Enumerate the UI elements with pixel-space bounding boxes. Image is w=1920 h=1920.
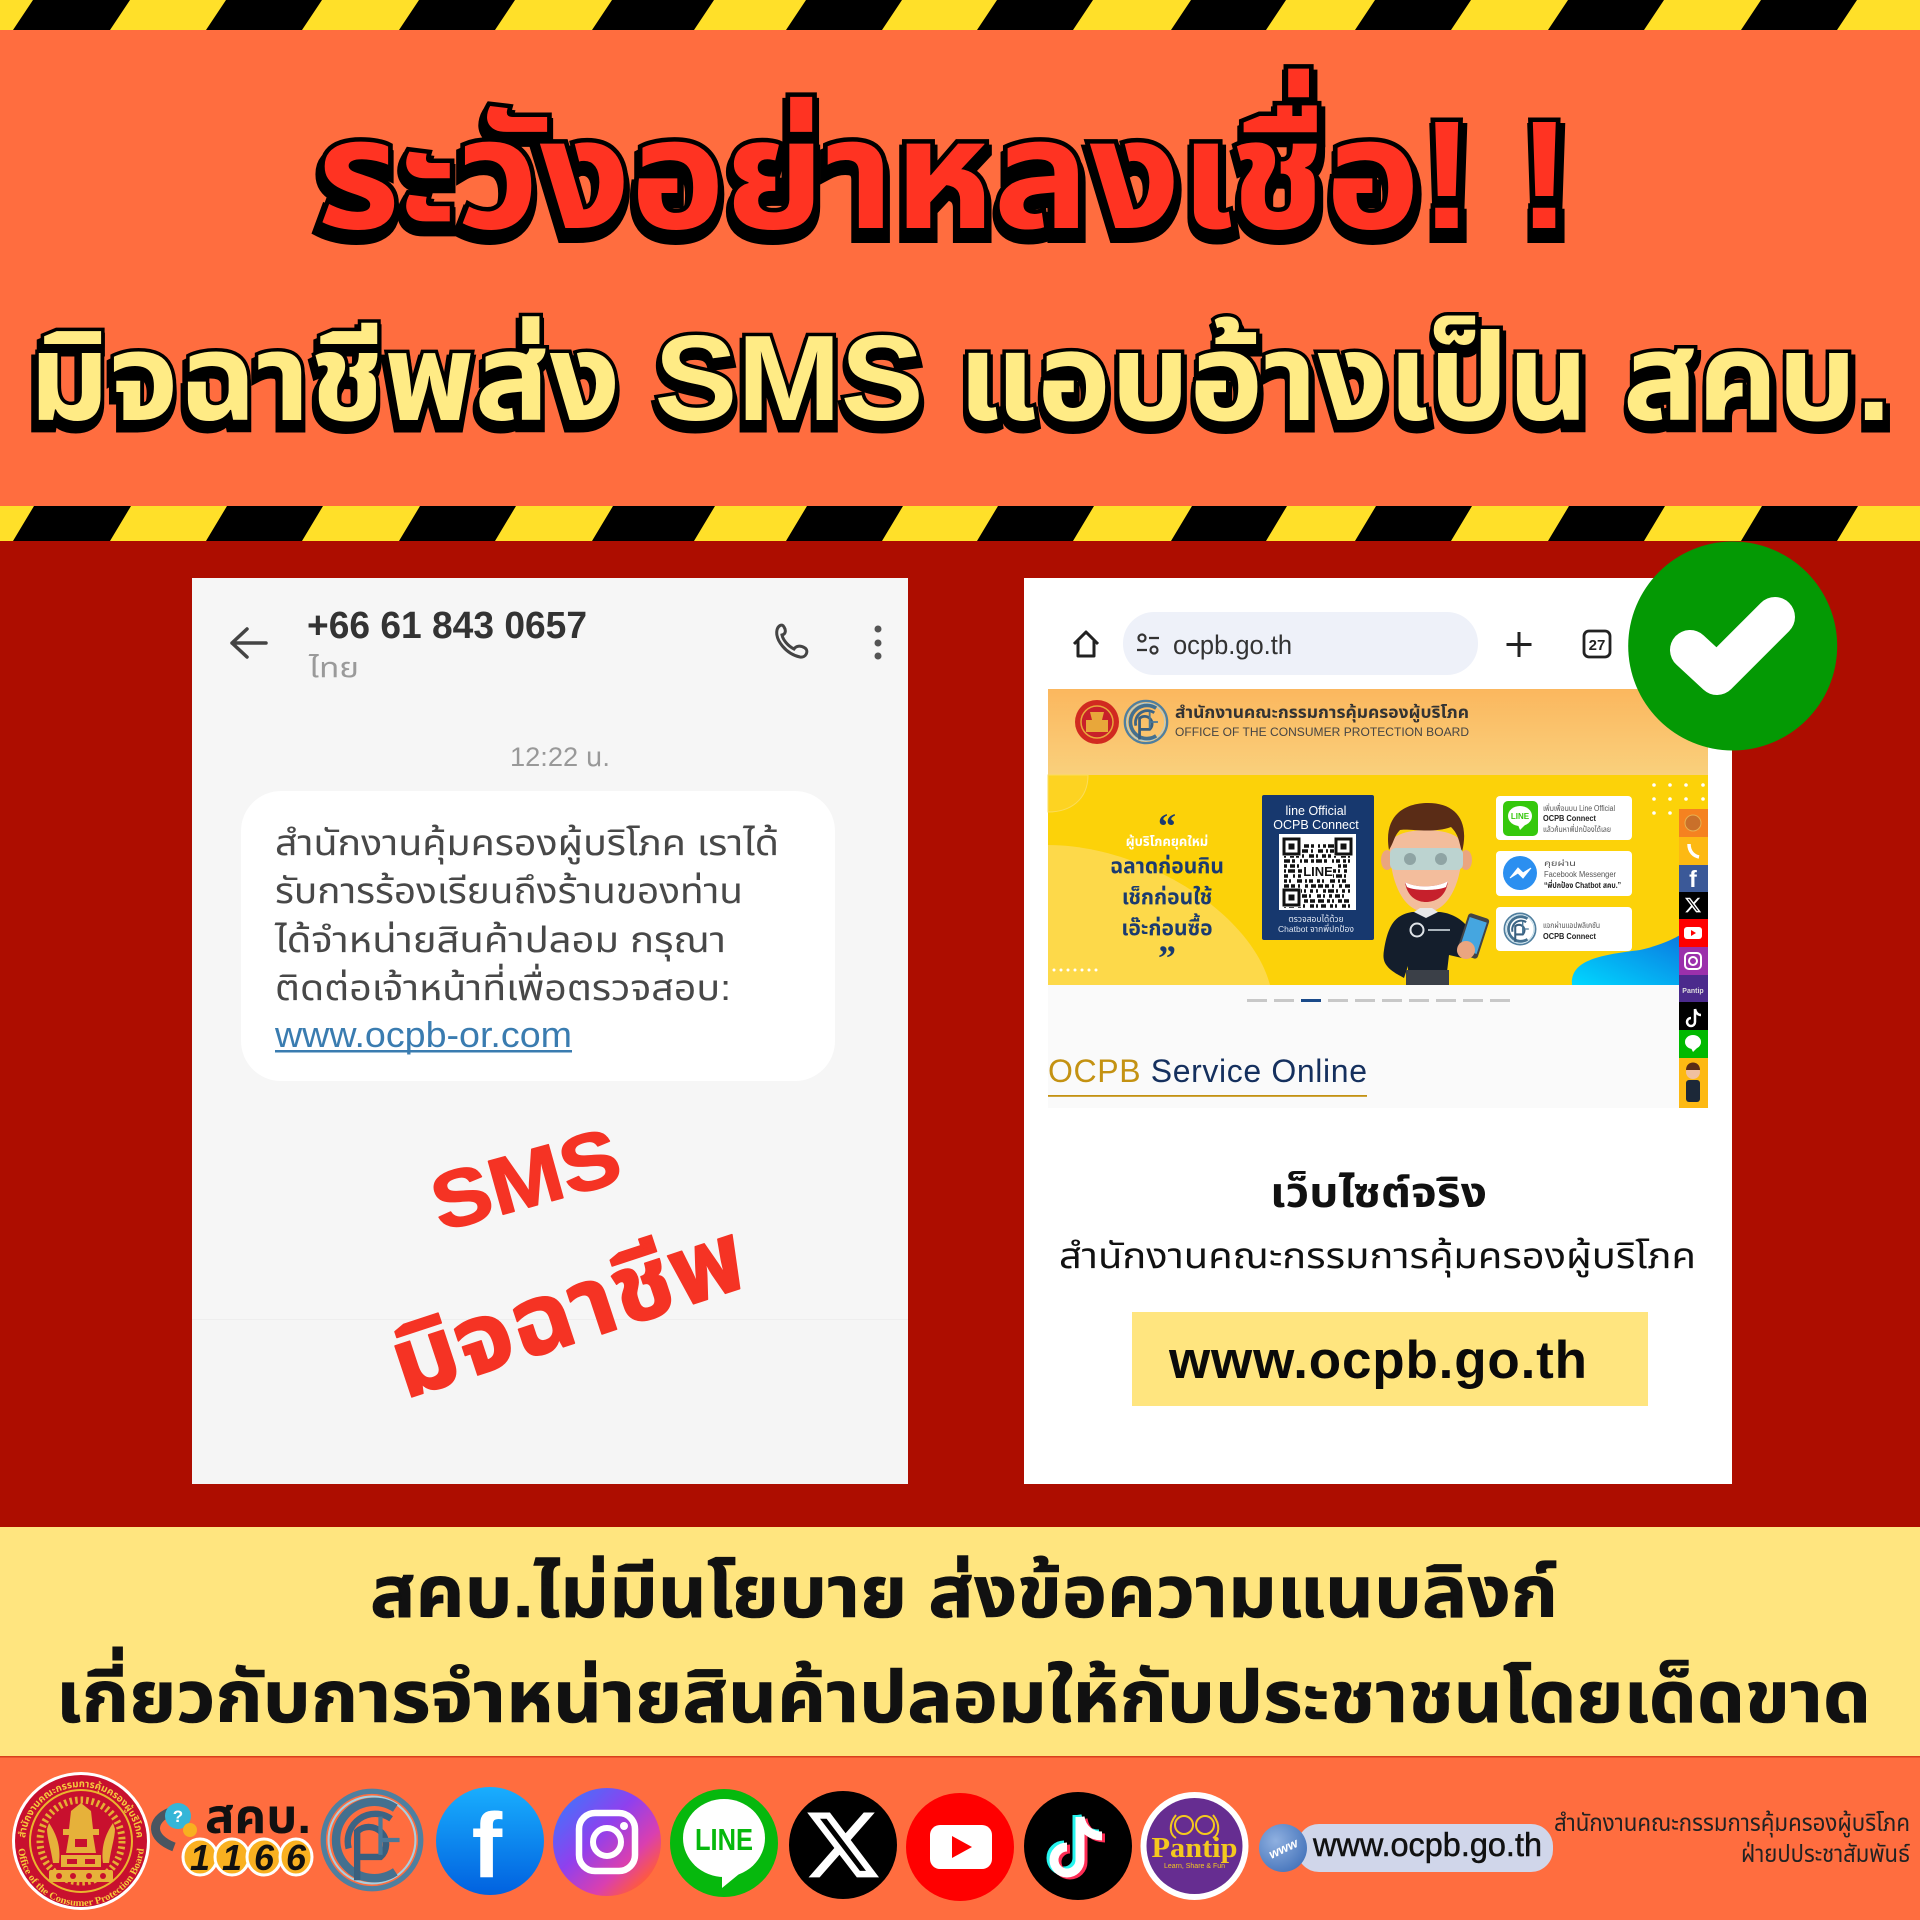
website side social strip: Pantip <box>1682 988 1704 995</box>
phone in hand <box>1456 913 1490 959</box>
icon: site settings <box>1137 634 1159 654</box>
contact cards: แจกผ่านแอปพลิเคชัน <box>1543 920 1600 930</box>
logo: consumer protection board seal: Office of the Consumer Protection Board <box>18 1848 144 1906</box>
subtitle: scam SMS impersonating OCPB: มิจฉาชีพส่ง SMS แอบอ้างเป็น สคบ. <box>29 310 1891 446</box>
address field <box>1123 612 1478 675</box>
icon: line: LINE <box>1511 812 1530 821</box>
logo: consumer protection board seal <box>12 1772 150 1910</box>
icon: green check <box>1628 542 1837 750</box>
slider indicator <box>1247 999 1510 1002</box>
QR panel: OCPB Connect <box>1273 818 1359 832</box>
title: main warning: ระวังอย่าหลงเชื่อ! ! <box>315 76 1573 269</box>
QR panel: LINE <box>1303 864 1333 879</box>
subtitle: scam SMS impersonating OCPB: มิจฉาชีพส่ง SMS แอบอ้างเป็น สคบ. <box>27 317 1893 453</box>
section title: OCPB Service Online <box>1048 1053 1367 1089</box>
icon: tabs count: 27 <box>1589 637 1605 654</box>
website pill <box>1259 1824 1553 1872</box>
header panel <box>0 0 1920 510</box>
notice band: สคบ.ไม่มีนโยบาย ส่งข้อความแนบลิงก์ <box>370 1553 1558 1633</box>
title: main warning: ระวังอย่าหลงเชื่อ! ! <box>317 68 1571 261</box>
footer <box>0 1756 1920 1920</box>
org name English: OFFICE OF THE CONSUMER PROTECTION BOARD <box>1175 725 1469 739</box>
cartoon mascot <box>1381 803 1490 985</box>
message bubble: สำนักงานคุ้มครองผู้บริโภค เราได้ <box>275 822 779 864</box>
slogan: ” <box>1158 938 1176 978</box>
contact cards: เพิ่มเพื่อนบน Line Official <box>1543 802 1615 813</box>
message bubble: www.ocpb-or.com <box>274 1014 572 1055</box>
icon: pantip: Learn, Share & Fun <box>1164 1863 1225 1870</box>
icon: tiktok <box>1024 1792 1132 1900</box>
slogan: “ <box>1158 806 1176 846</box>
logo: hotline 1766: 6 <box>254 1837 275 1878</box>
message bubble: ได้จำหน่ายสินค้าปลอม กรุณา <box>274 919 726 961</box>
icon: facebook <box>436 1787 544 1897</box>
logo: hotline 1766: 1 <box>222 1837 242 1878</box>
contact cards: คุยผ่าน <box>1544 858 1576 868</box>
logo: hotline 1766: 1 <box>190 1837 210 1878</box>
icon: messenger <box>1503 856 1537 890</box>
slogan: เอ๊ะก่อนซื้อ <box>1121 913 1213 940</box>
browser bar <box>1074 612 1610 675</box>
message bubble: ติดต่อเจ้าหน้าที่เพื่อตรวจสอบ: <box>275 963 731 1008</box>
message bubble: รับการร้องเรียนถึงร้านของท่าน <box>275 870 743 911</box>
stamp: scammer: มิจฉาชีพ <box>376 1200 758 1419</box>
sender number: +66 61 843 0657 <box>307 605 587 647</box>
website side social strip <box>1679 809 1708 1108</box>
icon: pantip: Pantip <box>1152 1833 1238 1864</box>
icon: ocpb <box>1504 913 1536 945</box>
contact cards: OCPB Connect <box>1543 932 1596 941</box>
icon: tabs count <box>1584 631 1610 657</box>
icon: instagram <box>553 1788 661 1896</box>
contact cards: “พี่ปกป้อง Chatbot สคบ.” <box>1544 879 1621 890</box>
website pill: www.ocpb.go.th <box>1312 1826 1542 1863</box>
decorative dots <box>1052 783 1705 972</box>
icon: youtube <box>906 1793 1014 1901</box>
official URL box <box>1132 1312 1648 1406</box>
logo: hotline 1766: สคบ. <box>205 1791 311 1844</box>
credit text: ฝ่ายปประชาสัมพันธ์ <box>1741 1841 1910 1868</box>
panel: fake SMS screenshot <box>192 578 908 1484</box>
logo: hotline 1766: 6 <box>286 1837 307 1878</box>
address text: ocpb.go.th <box>1173 630 1292 660</box>
icon: line <box>670 1789 778 1897</box>
panel: real website <box>1024 578 1732 1484</box>
logo: OCPB <box>323 1791 421 1889</box>
icon: home <box>1074 632 1098 656</box>
QR panel: ตรวจสอบได้ด้วย <box>1288 914 1344 924</box>
org name Thai: สำนักงานคณะกรรมการคุ้มครองผู้บริโภค <box>1175 703 1469 723</box>
icon: back arrow <box>232 629 266 657</box>
organisation name: สำนักงานคณะกรรมการคุ้มครองผู้บริโภค <box>1059 1235 1696 1277</box>
slogan: ผู้บริโภคยุคใหม่ <box>1126 834 1208 850</box>
contact cards: OCPB Connect <box>1543 814 1596 823</box>
logo: hotline 1766: ? <box>173 1807 183 1826</box>
notice band <box>0 1527 1920 1756</box>
icon: seal small <box>1075 700 1119 744</box>
credit text <box>1554 1810 1910 1868</box>
website banner <box>1048 775 1708 985</box>
sender country: ไทย <box>308 652 359 683</box>
slogan <box>1110 806 1224 978</box>
bottom hazard stripe of header <box>0 506 1920 541</box>
message bubble <box>241 791 835 1081</box>
icon: plus <box>1506 632 1532 657</box>
contact cards: Facebook Messenger <box>1544 870 1616 879</box>
official URL box: www.ocpb.go.th <box>1168 1331 1587 1390</box>
contact cards: แล้วค้นหาพี่ปกป้องได้เลย <box>1543 823 1611 834</box>
QR panel <box>1262 795 1374 940</box>
icon: X <box>789 1791 897 1899</box>
slogan: ฉลาดก่อนกิน <box>1110 855 1224 878</box>
icon: pantip <box>1140 1792 1248 1900</box>
message time: 12:22 น. <box>510 742 610 772</box>
contact cards <box>1496 796 1632 951</box>
icon: OCPB logo small <box>1125 701 1167 743</box>
QR panel: line Official <box>1286 804 1346 818</box>
blue blob <box>1572 934 1682 985</box>
logo: hotline 1766 <box>155 1791 312 1878</box>
label: real website: เว็บไซต์จริง <box>1270 1169 1487 1216</box>
top hazard stripe <box>0 0 1920 30</box>
website side social strip: f <box>1689 866 1697 892</box>
website lower section <box>1048 985 1679 1108</box>
notice band: เกี่ยวกับการจำหน่ายสินค้าปลอมให้กับประชาชนโดยเด็ดขาด <box>56 1647 1871 1738</box>
QR panel: Chatbot จากพี่ปกป้อง <box>1278 923 1354 934</box>
website pill: www <box>1266 1835 1301 1862</box>
icon: line <box>1503 801 1538 836</box>
stamp: SMS: SMS <box>421 1111 630 1248</box>
slogan: เช็กก่อนใช้ <box>1122 886 1212 909</box>
icon: phone <box>777 625 807 657</box>
icon: line: LINE <box>695 1822 753 1857</box>
website header <box>1048 689 1708 775</box>
logo: consumer protection board seal: สำนักงานคณะกรรมการคุ้มครองผู้บริโภค <box>18 1781 142 1838</box>
icon: menu dots <box>874 626 882 660</box>
icon: facebook: f <box>472 1795 503 1897</box>
